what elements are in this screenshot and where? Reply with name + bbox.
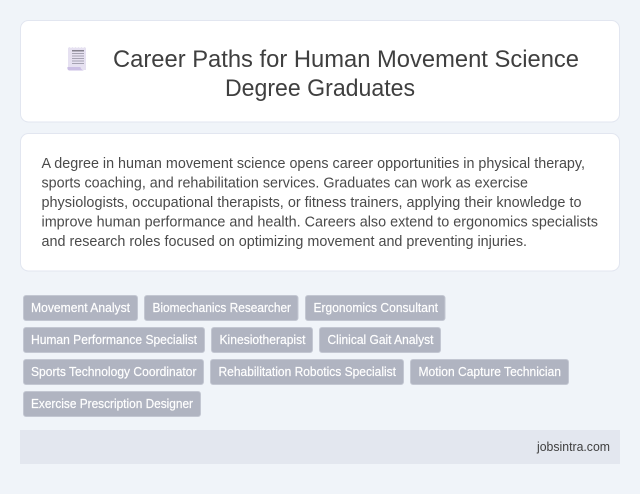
tag: Biomechanics Researcher: Biomechanics Researcher [152,300,292,315]
tag: Sports Technology Coordinator [24,360,204,384]
tag: Rehabilitation Robotics Specialist [210,360,404,384]
tag: Motion Capture Technician: Motion Capture Technician [418,364,561,379]
footer bar [20,430,620,464]
tag: Kinesiotherapist [212,328,312,352]
title: Career Paths for Human Movement Science [113,46,579,73]
tag: Ergonomics Consultant: Ergonomics Consultant [314,300,438,315]
tag: Sports Technology Coordinator: Sports Technology Coordinator [31,364,197,379]
title [113,46,579,102]
tag: Biomechanics Researcher [144,296,298,320]
description text: improve human performance and health. Careers also extend to ergonomics specialists [42,214,598,230]
tag: Human Performance Specialist [24,328,204,352]
description text: sports coaching, and rehabilitation services. Graduates can work as exercise [42,174,528,192]
panel: description card [20,134,620,271]
tag: Human Performance Specialist: Human Performance Specialist [31,332,197,347]
description text: physiologists, occupational therapists, or fitness trainers, applying their knowledge to [42,194,582,211]
tag: Clinical Gait Analyst: Clinical Gait Analyst [328,332,434,347]
tag: Kinesiotherapist: Kinesiotherapist [220,332,306,347]
icon: paper scroll document [67,47,86,70]
title: Degree Graduates [225,75,415,102]
tag list: career titles [24,296,568,416]
panel: header card [20,20,620,122]
description text [42,155,598,250]
description text: A degree in human movement science opens career opportunities in physical therapy, [42,155,585,172]
tag: Exercise Prescription Designer: Exercise Prescription Designer [31,396,194,411]
tag: Exercise Prescription Designer [24,392,200,416]
tag: Movement Analyst [24,296,138,320]
tag: Rehabilitation Robotics Specialist: Rehabilitation Robotics Specialist [218,364,396,379]
footer text: source: jobsintra.com [536,440,610,454]
tag: Ergonomics Consultant [306,296,445,320]
tag: Motion Capture Technician [410,360,568,384]
tag: Movement Analyst: Movement Analyst [31,300,130,315]
description text: and research roles focused on optimizing movement and preventing injuries. [42,233,527,250]
tag: Clinical Gait Analyst [320,328,440,352]
